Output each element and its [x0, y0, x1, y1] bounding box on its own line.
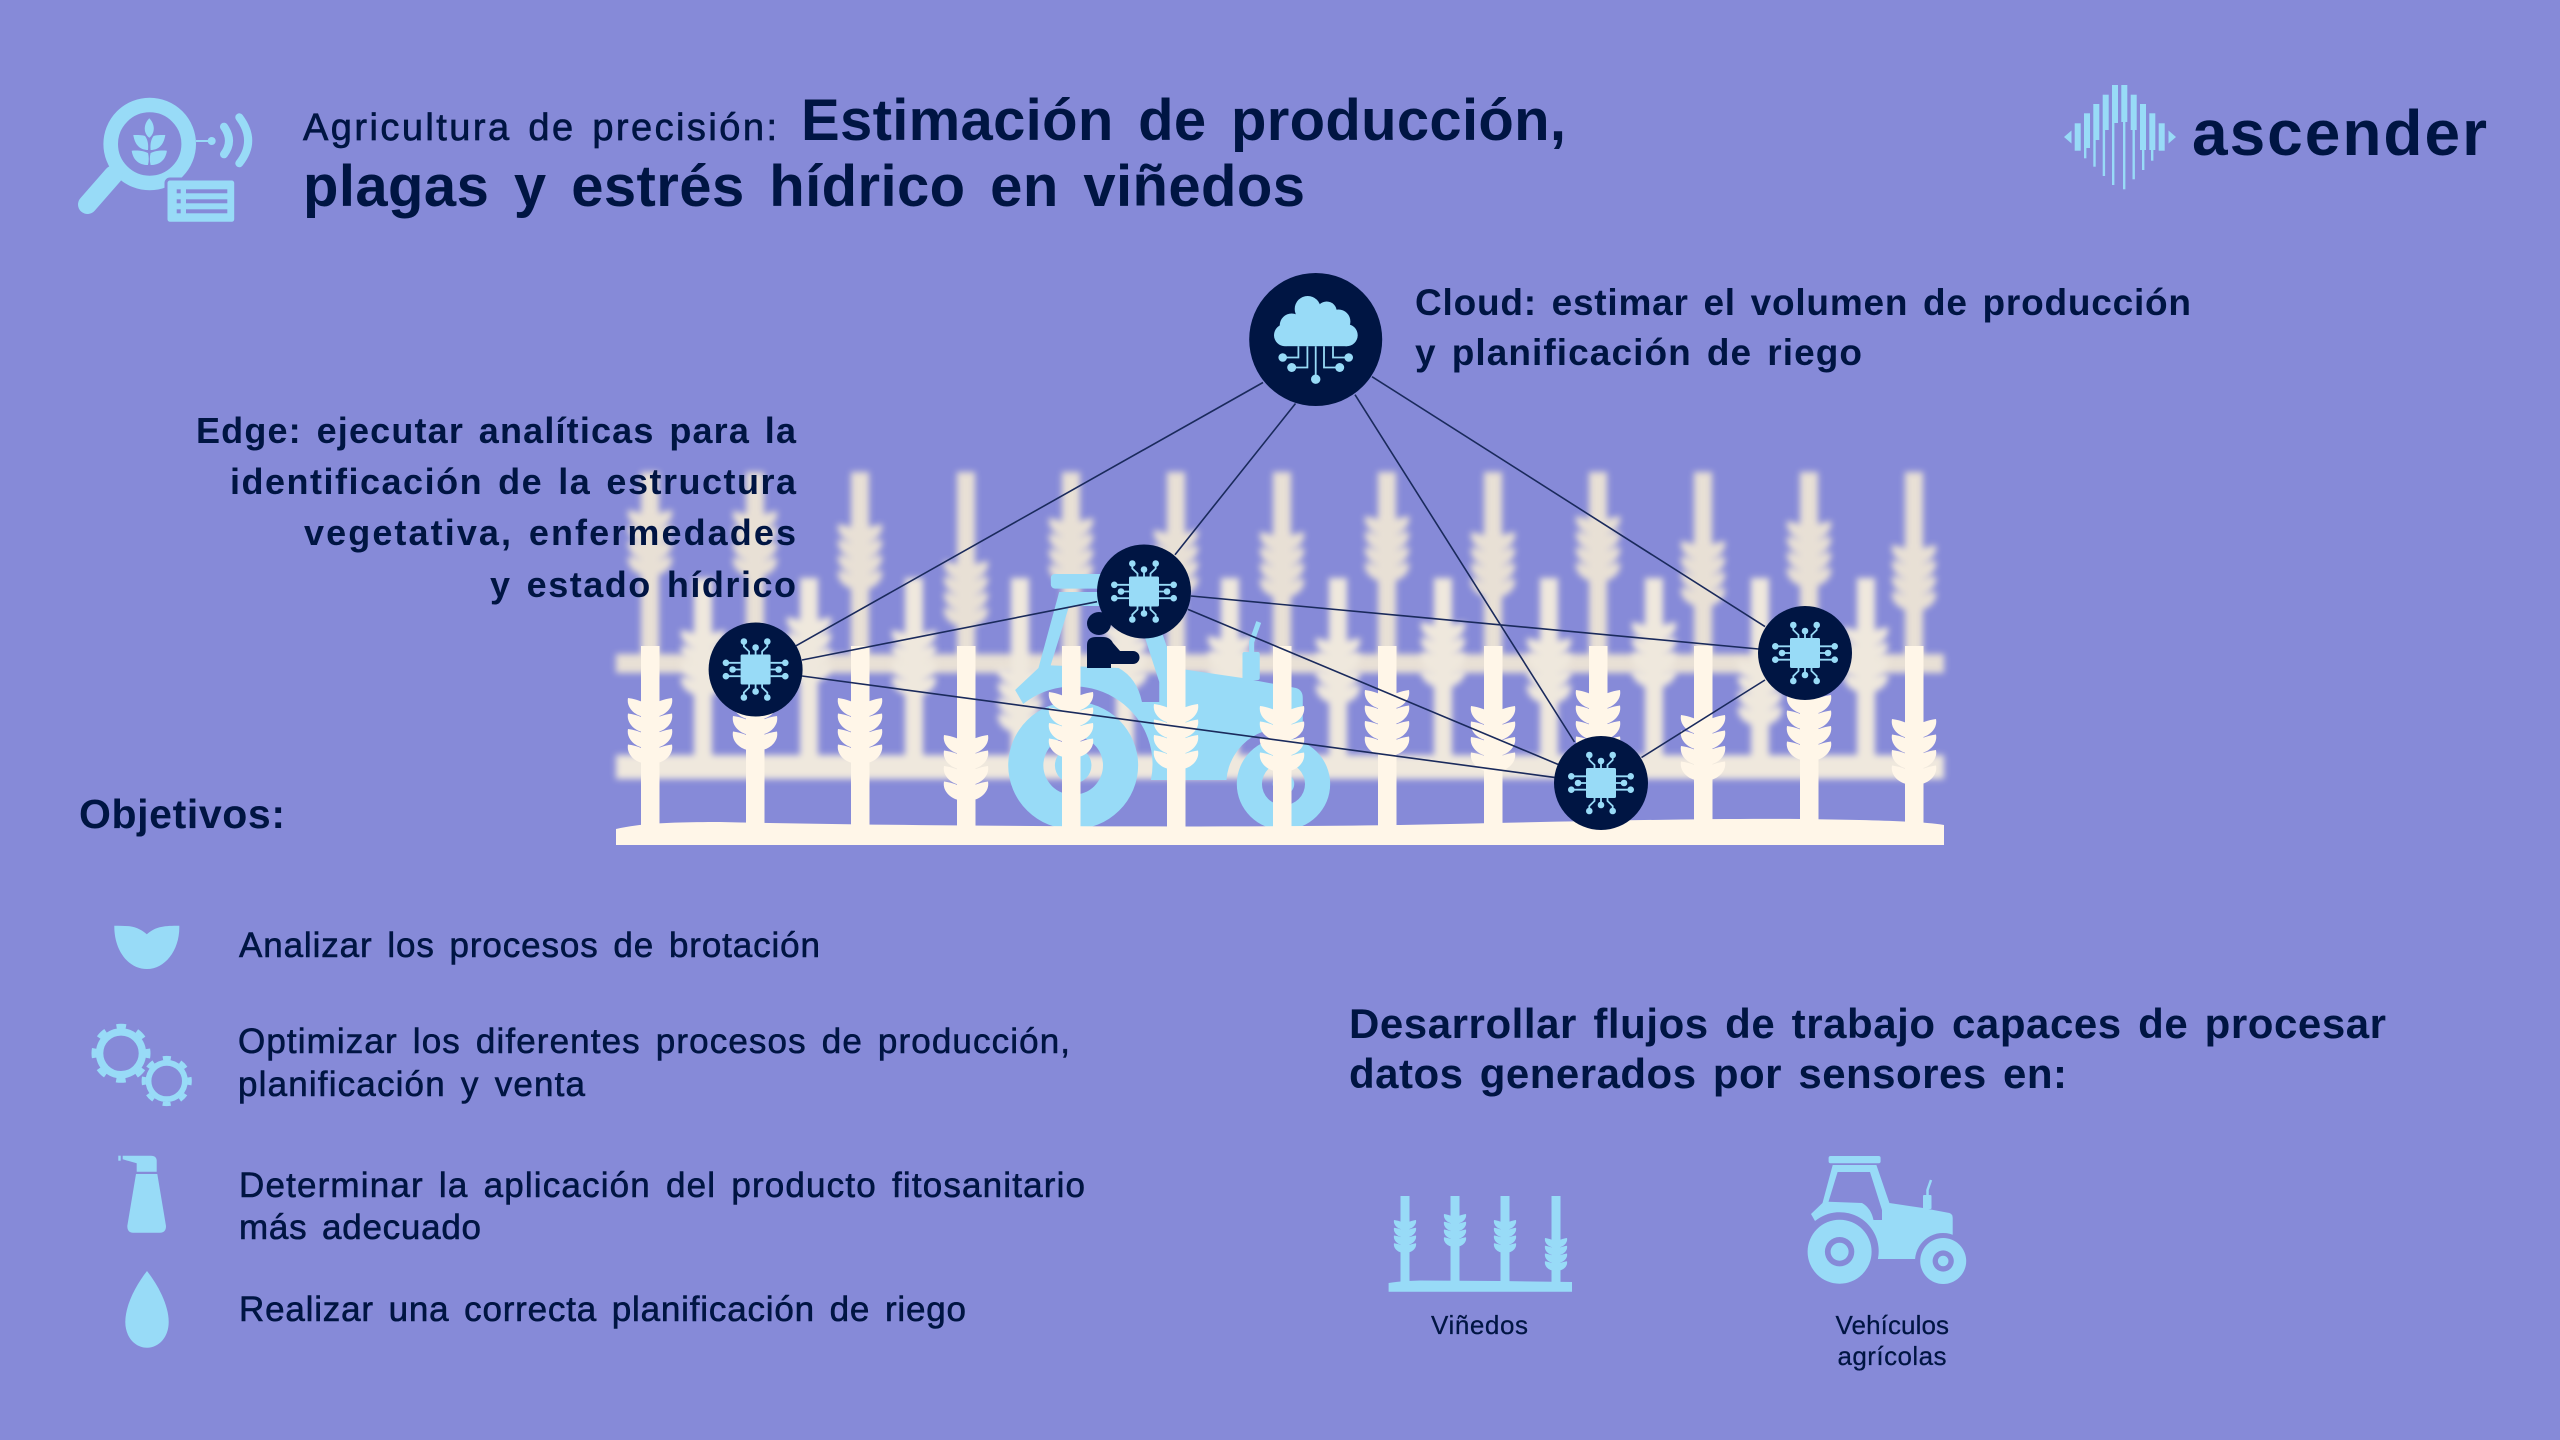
- logo: ascender: ascender: [2192, 97, 2487, 169]
- heading: workflows: datos generados por sensores en:: [1349, 1050, 2067, 1097]
- cloud node: [1249, 273, 1382, 406]
- callout: edge: [196, 410, 797, 605]
- heading: objetivos: Objetivos:: [79, 791, 285, 837]
- icon: small vineyard: [1389, 1196, 1572, 1292]
- label: vehículos agrícolas: Vehículos: [1836, 1310, 1949, 1340]
- icon: magnifier with wheat, signal and list: [88, 105, 248, 223]
- background vineyard row, far (blurred): [616, 472, 1944, 673]
- tractor illustration: [1008, 574, 1330, 830]
- edge node: tractor: [1097, 544, 1191, 638]
- icon: water drop: [125, 1271, 169, 1348]
- icon: gears: [94, 1026, 190, 1104]
- objective: fitosanitario: Determinar la aplicación del producto fitosanitario: [239, 1166, 1085, 1205]
- objective: optimizar: planificación y venta: [238, 1065, 586, 1104]
- farmer silhouette: [1087, 612, 1140, 668]
- title: plagas y estrés hídrico en viñedos: [303, 154, 1305, 219]
- label: vehículos agrícolas: agrícolas: [1838, 1341, 1946, 1371]
- icon: cloud with circuit traces: [1274, 296, 1358, 384]
- objective: brotación: Analizar los procesos de brotación: [239, 926, 820, 965]
- callout: edge: y estado hídrico: [490, 564, 796, 605]
- title: Estimación de producción,: [801, 88, 1566, 153]
- title: Agricultura de precisión:: [303, 107, 777, 149]
- objective: riego: Realizar una correcta planificación de riego: [239, 1290, 966, 1329]
- edge node: bottom: [1554, 736, 1648, 830]
- objective: optimizar: [238, 1022, 1070, 1104]
- callout: edge: identificación de la estructura: [230, 461, 797, 502]
- callout: edge: vegetativa, enfermedades: [304, 512, 796, 553]
- callout: edge: Edge: ejecutar analíticas para la: [196, 410, 797, 451]
- objective: fitosanitario: más adecuado: [239, 1208, 481, 1247]
- background vineyard row, middle (blurred): [616, 578, 1944, 779]
- logo: ascender: [2064, 85, 2487, 189]
- network connection lines: [796, 377, 1765, 777]
- callout: cloud: Cloud: estimar el volumen de producción: [1415, 282, 2191, 323]
- callout: cloud: [1415, 282, 2191, 373]
- icon: spray bottle: [118, 1156, 166, 1233]
- icon: small tractor: [1808, 1156, 1966, 1284]
- title: [303, 88, 1566, 219]
- label: viñedos: Viñedos: [1431, 1310, 1528, 1340]
- heading: workflows: [1349, 1000, 2386, 1097]
- label: vehículos agrícolas: [1836, 1310, 1949, 1371]
- edge node: left: [709, 622, 803, 716]
- callout: cloud: y planificación de riego: [1415, 332, 1862, 373]
- foreground vineyard row: [616, 646, 1944, 845]
- objective: optimizar: Optimizar los diferentes procesos de producción,: [238, 1022, 1070, 1061]
- edge node: right: [1758, 606, 1852, 700]
- heading: workflows: Desarrollar flujos de trabajo capaces de procesar: [1349, 1000, 2386, 1047]
- icon: leaf sprout: [114, 926, 179, 969]
- objective: fitosanitario: [239, 1166, 1085, 1247]
